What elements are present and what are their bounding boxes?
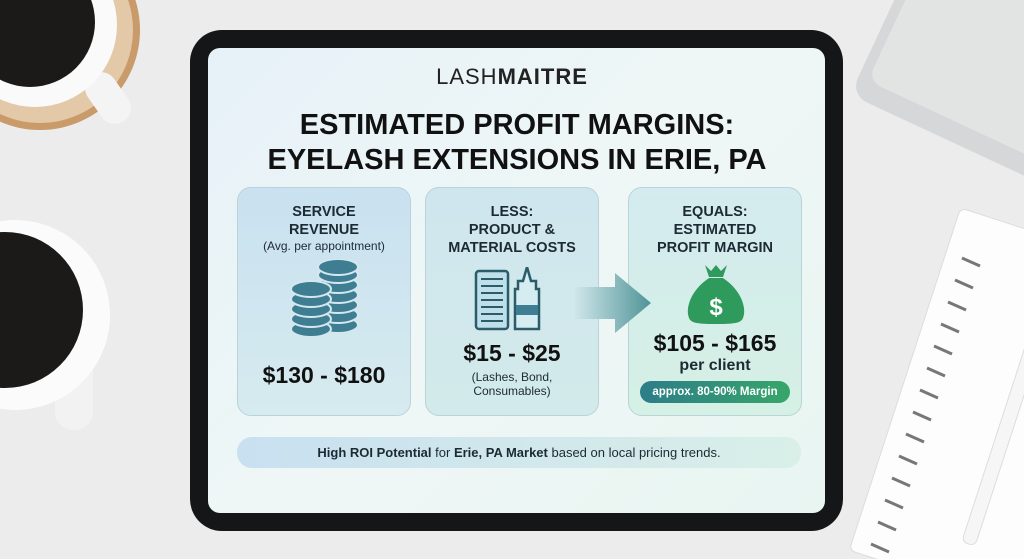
heading: service revenue: REVENUE [289, 222, 359, 238]
heading: service revenue [263, 204, 385, 253]
logo: LASHMAITRE [436, 64, 588, 89]
arrow [578, 273, 651, 333]
icon: coffee cup left [0, 220, 110, 430]
heading: costs: PRODUCT & [469, 222, 555, 238]
heading: profit: EQUALS: [682, 204, 748, 220]
price: revenue: $130 - $180 [263, 362, 385, 388]
icon: notebook [849, 208, 1024, 559]
badge: margin [640, 381, 790, 403]
panel: service revenue [237, 187, 411, 416]
footer bar: High ROI Potential for Erie, PA Market based on local pricing trends. [317, 445, 721, 460]
price: costs: $15 - $25 [463, 340, 561, 366]
icon: coffee cup top-left [0, 0, 140, 130]
tablet [190, 30, 843, 531]
icon: coins [292, 260, 357, 336]
price: profit: $105 - $165 [654, 330, 776, 356]
heading: costs: LESS: [491, 204, 533, 220]
panel: profit [628, 187, 802, 416]
heading: profit [657, 204, 773, 256]
panel: costs: (Lashes, Bond, [472, 370, 552, 384]
heading: costs [448, 204, 576, 256]
icon: lash tray and glue [474, 267, 540, 330]
badge: margin: approx. 80-90% Margin [652, 386, 778, 398]
title: ESTIMATED PROFIT MARGINS: [300, 109, 734, 141]
panel: profit: per client [679, 357, 751, 374]
title: EYELASH EXTENSIONS IN ERIE, PA [267, 144, 766, 176]
panel: costs [425, 187, 599, 416]
heading: profit: ESTIMATED [674, 222, 756, 238]
heading: service revenue: (Avg. per appointment) [263, 239, 385, 253]
icon: laptop [850, 0, 1024, 188]
title [267, 109, 766, 176]
heading: profit: PROFIT MARGIN [657, 240, 773, 256]
heading: costs: MATERIAL COSTS [448, 240, 576, 256]
screen [208, 48, 825, 513]
icon: money bag: $ [709, 294, 723, 321]
heading: service revenue: SERVICE [292, 204, 356, 220]
icon: money bag [688, 265, 744, 324]
footer bar [237, 437, 801, 468]
panel: costs: Consumables) [473, 384, 551, 398]
